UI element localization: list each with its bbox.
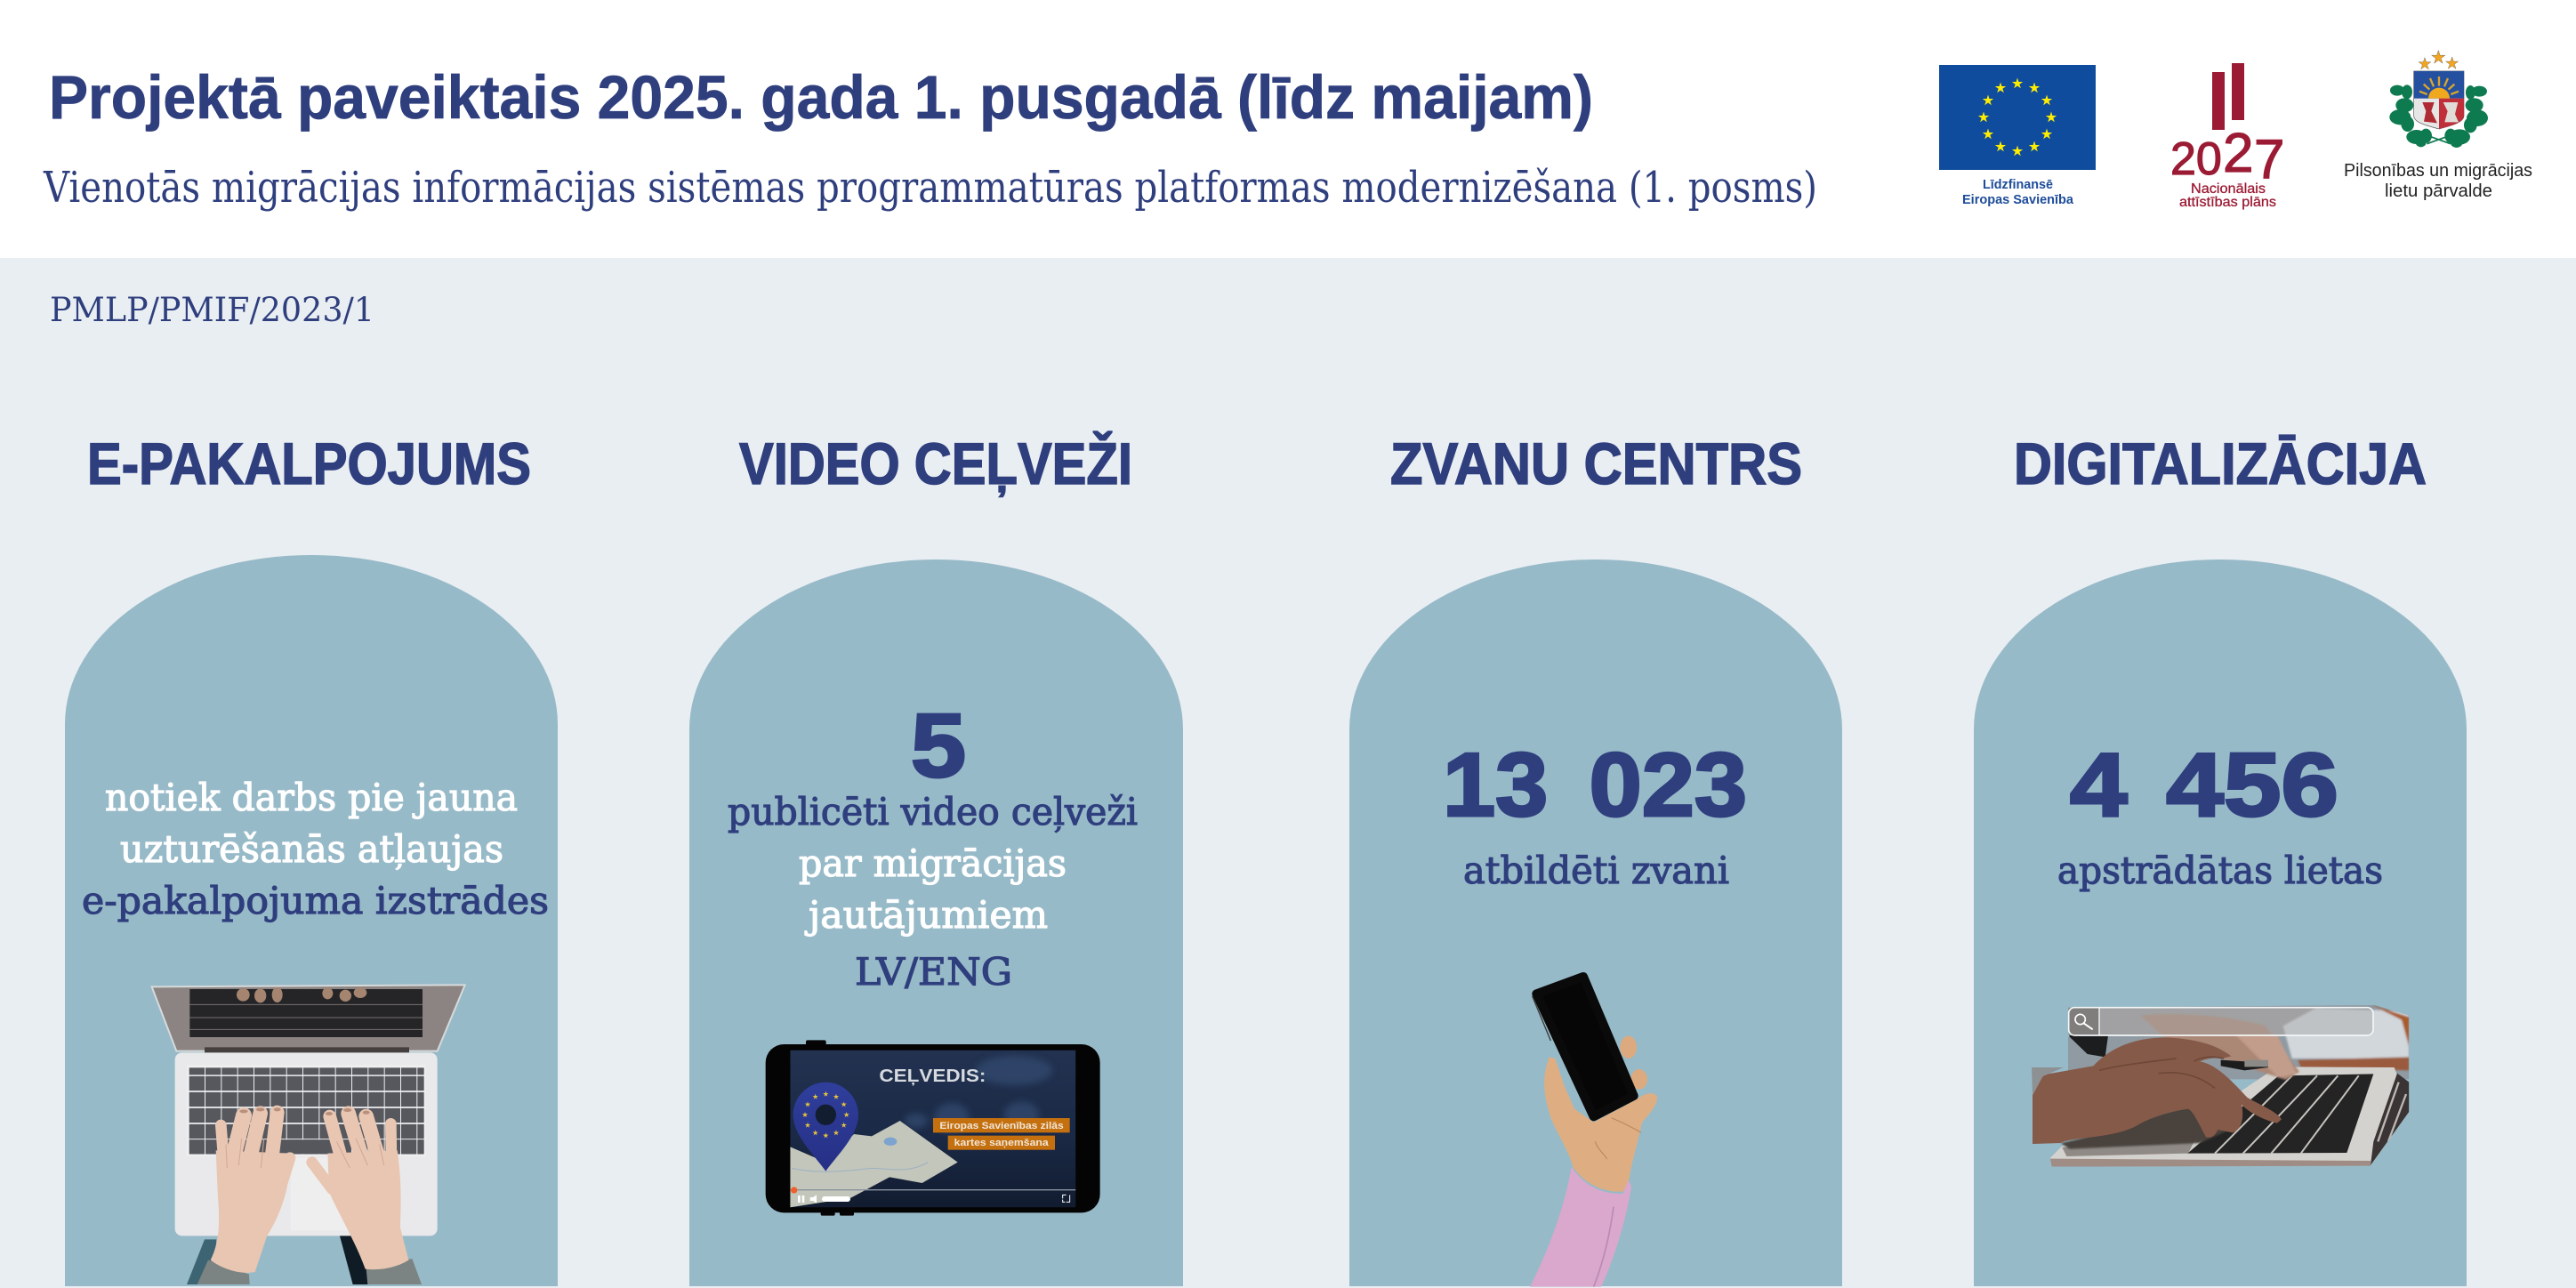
- image: hands on laptop with search bar: [2032, 1005, 2409, 1167]
- arch background: [1974, 559, 2467, 1286]
- description text: notiek darbs pie jauna: [105, 776, 518, 819]
- description text: jautājumiem: [804, 893, 1048, 937]
- description text: uzturēšanās atļaujas: [120, 827, 503, 871]
- arch background: [1349, 559, 1842, 1286]
- player controls: [790, 1189, 1076, 1190]
- logo: national development plan 2027: Nacionālais: [2191, 181, 2266, 197]
- description text: publicēti video ceļveži: [728, 790, 1138, 833]
- panel: e-pakalpojums: [65, 431, 558, 1286]
- image: hands typing on laptop: [152, 985, 465, 1284]
- stat label: apstrādātas lietas: [2057, 849, 2383, 892]
- logo: national development plan 2027: 7: [2254, 129, 2284, 190]
- back hand: [2141, 1014, 2299, 1080]
- image: phone with video guide: Eiropas Savienības zilās: [939, 1121, 1064, 1131]
- image: phone with video guide: kartes saņemšana: [954, 1138, 1049, 1148]
- stat label: atbildēti zvani: [1463, 849, 1729, 892]
- subtitle: Vienotās migrācijas informācijas sistēmas programmatūras platformas modernizēšana (1. posms): [43, 163, 1817, 213]
- arch background: [689, 559, 1183, 1286]
- pin: [793, 1083, 858, 1171]
- heading: video ceļveži: VIDEO CEĻVEŽI: [739, 431, 1132, 497]
- search bar: [2069, 1008, 2373, 1035]
- header band: [0, 0, 2576, 258]
- title: Projektā paveiktais 2025. gada 1. pusgadā (līdz maijam): [49, 63, 1593, 132]
- front hand: [2033, 1038, 2282, 1144]
- logo: EU co-funded: Līdzfinansē: [1983, 177, 2053, 192]
- logo: national development plan 2027: [2170, 63, 2284, 210]
- image: phone with video guide: [766, 1040, 1100, 1216]
- logo: PMLP coat of arms: [2344, 51, 2532, 201]
- project code: PMLP/PMIF/2023/1: [50, 291, 374, 329]
- description text: par migrācijas: [799, 841, 1067, 885]
- logo: EU co-funded: Eiropas Savienība: [1962, 192, 2074, 207]
- heading: e-pakalpojums: E-PAKALPOJUMS: [87, 431, 531, 496]
- image: hand holding phone: [1530, 977, 1657, 1287]
- stat: processed cases: 4 456: [2070, 736, 2339, 835]
- logo: PMLP coat of arms: Pilsonības un migrācijas: [2344, 161, 2532, 181]
- stat: number of guides: 5: [911, 696, 966, 796]
- panel: zvanu centrs: [1349, 431, 1842, 1287]
- heading: zvanu centrs: ZVANU CENTRS: [1390, 431, 1802, 496]
- shadow under hand: [2061, 1106, 2230, 1149]
- description text: [728, 790, 1138, 994]
- stat: answered calls: 13 023: [1443, 736, 1747, 835]
- panel: digitalizācija: [1974, 431, 2467, 1286]
- panel: video ceļveži: [689, 431, 1183, 1286]
- logo: national development plan 2027: 20: [2170, 133, 2222, 185]
- logo: EU co-funded: [1939, 65, 2096, 207]
- description text: LV/ENG: [855, 950, 1012, 994]
- arch background: [65, 555, 558, 1286]
- map: [790, 1121, 958, 1207]
- laptop: [2050, 1067, 2409, 1167]
- logo: PMLP coat of arms: lietu pārvalde: [2385, 181, 2492, 201]
- logo: national development plan 2027: attīstības plāns: [2179, 195, 2276, 210]
- heading: digitalizācija: DIGITALIZĀCIJA: [2014, 431, 2427, 496]
- description text: e-pakalpojuma izstrādes: [82, 879, 549, 922]
- description text: [82, 776, 549, 922]
- video title: CEĻVEDIS:: [879, 1066, 986, 1086]
- logo: national development plan 2027: 2: [2223, 123, 2253, 184]
